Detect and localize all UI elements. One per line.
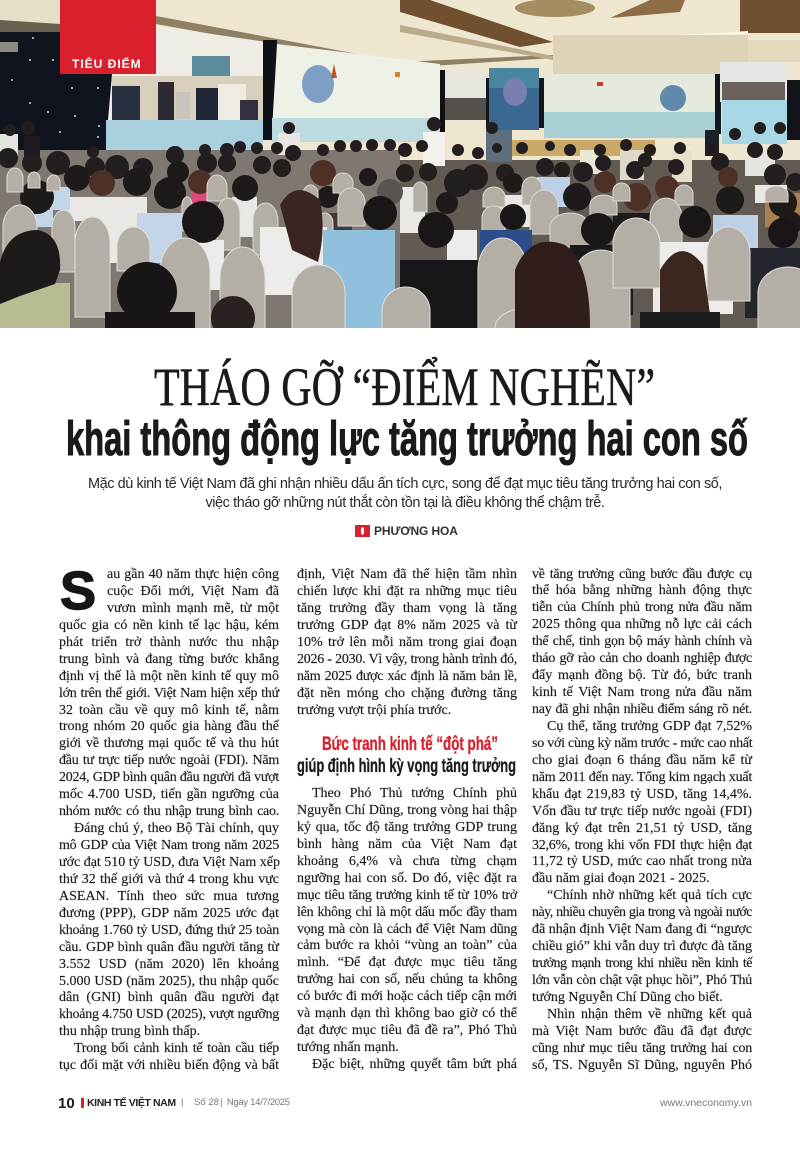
- text column 1: đầu tư trực tiếp nước ngoài (FDI). Năm: [59, 753, 279, 768]
- text column 1: khoảng 4.750 USD (2025), vượt ngưỡng: [59, 1007, 279, 1022]
- forum backdrops and stage: [272, 44, 800, 156]
- text column 1: lớn trên thế giới. Việt Nam hiện xếp thứ: [59, 686, 279, 701]
- section tag: Tiêu điểm: TIÊU ĐIỂM: [72, 57, 142, 71]
- text column 3: Nhìn nhận thêm về những kết quả: [547, 1007, 752, 1022]
- text column 1: thu nhập trung bình thấp.: [59, 1024, 200, 1039]
- section tag: Tiêu điểm: [60, 0, 156, 74]
- text column 3: Cụ thể, tăng trưởng GDP đạt 7,52%: [547, 719, 752, 734]
- text column 2, upper part: 10% trở lên mỗi năm trong giai đoạn: [297, 635, 517, 650]
- text column 3: cũng như mục tiêu tăng trưởng hai con: [532, 1041, 752, 1056]
- front chairs: [3, 205, 800, 348]
- hero photo: conference hall with audience: [0, 0, 800, 328]
- audience: [0, 117, 800, 348]
- text column 2, upper part: trưởng GDP đạt 8% năm 2025 và từ: [297, 618, 517, 633]
- byline with red icon: PHƯƠNG HOA: [374, 524, 458, 538]
- text column 3: này, nhiều chuyên gia trong và ngoài nước: [532, 905, 752, 920]
- text column 2, lower part: Đặc biệt, những quyết tâm bứt phá: [312, 1057, 517, 1072]
- text column 3: đăng ký đạt trên 21,51 tỷ USD, tăng: [532, 821, 752, 836]
- text column 2, upper part: định, Việt Nam đã thể hiện tầm nhìn: [297, 567, 517, 582]
- text column 2, upper part: năm 2025 được xác định là năm bản lề,: [297, 669, 517, 684]
- text column 1: vươn mình mạnh mẽ, từ một: [107, 601, 279, 616]
- deck text: [88, 476, 722, 511]
- text column 2, upper part: đặt nền móng cho chặng đường tăng: [297, 686, 517, 701]
- text column 3: “Chính nhờ những kết quả tích cực: [547, 888, 752, 903]
- text column 3: so với cùng kỳ năm trước - mức cao nhất: [532, 736, 752, 751]
- text column 2, lower part: lên không chỉ là một dấu mốc đầy tham: [297, 905, 517, 920]
- text column 3: cho giai đoạn 6 tháng đầu năm kể từ: [532, 753, 752, 768]
- issue date: | Ngày 14/7/2025: [220, 1097, 290, 1108]
- back rows: [0, 117, 800, 197]
- text column 3: nay đã ghi nhận nhiều điểm sáng rõ nét.: [532, 702, 752, 717]
- dark starry wall: [0, 32, 112, 157]
- text column 2, lower part: trưởng hai con số, nếu chúng ta không: [297, 972, 517, 987]
- text column 3: thể chế, tinh gọn bộ máy hành chính và: [532, 634, 752, 649]
- text column 3: 2025 thông qua những nỗ lực cải cách: [532, 617, 752, 632]
- text column 3: mà Việt Nam bước đầu đã đạt được: [532, 1024, 752, 1039]
- text column 3: đã nhận định Việt Nam đang đi “ngược: [532, 922, 752, 937]
- red marker: [81, 1098, 84, 1108]
- text column 3: khẩu đạt 219,83 tỷ USD, tăng 14,4%.: [532, 787, 752, 802]
- headline: THÁO GỠ “ĐIỂM NGHẼN”: [154, 355, 655, 417]
- text column 1: 3.552 USD (năm 2020) lên khoảng: [59, 957, 279, 972]
- text column 1: 32 toàn cầu về quy mô kinh tế, nằm: [59, 702, 279, 718]
- text column 1: 2024, GDP bình quân đầu người đã vượt: [59, 770, 279, 785]
- text column 2, upper part: trưởng vượt trội phía trước.: [297, 702, 451, 718]
- text column 3: tiễn của Chính phủ trong nửa đầu năm: [532, 600, 752, 615]
- text column 1: giới về thương mại quốc tế và thu hút: [59, 736, 279, 751]
- text column 2, lower part: kỷ qua, tốc độ tăng trưởng GDP trung: [297, 820, 517, 835]
- text column 1: khoảng 1.760 tỷ USD, đứng thứ 25 toàn: [59, 923, 279, 938]
- text column 3: kinh tế Việt Nam trong nửa đầu năm: [532, 685, 752, 700]
- text column 1: định vị thế là một nền kinh tế quy mô: [59, 669, 279, 684]
- text column 1: nhóm nước có thu nhập trung bình cao.: [59, 804, 279, 819]
- text column 2, lower part: Theo Phó Thủ tướng Chính phủ: [312, 786, 517, 801]
- text column 3: đầu năm giai đoạn 2021 - 2025.: [532, 871, 710, 886]
- text column 3: 32,6%, trong khi vốn FDI thực hiện đạt: [532, 838, 752, 852]
- foreground attendees: [0, 230, 720, 340]
- text column 2, lower part: khoảng 6,4% và chưa từng chạm: [297, 854, 517, 869]
- text column 2, lower part: và mạnh dạn thì không bao giờ có thể: [297, 1006, 517, 1021]
- text column 2, lower part: [296, 786, 518, 1072]
- issue number: | Số 28: [181, 1097, 219, 1108]
- text column 1: mô GDP của Việt Nam trong năm 2025: [59, 838, 279, 853]
- text column 3: trưởng mạnh trong khi nhiều nền kinh tế: [532, 956, 752, 971]
- text column 2, lower part: đạt được mục tiêu đã đề ra”, Phó Thủ: [297, 1023, 517, 1038]
- text column 2, lower part: mục tiêu tăng trưởng kinh tế từ 10% trở: [297, 888, 517, 903]
- text column 1: đương (PPP), GDP năm 2025 ước đạt: [59, 906, 279, 921]
- text column 2, upper part: tăng trưởng đầy tham vọng là tăng: [297, 601, 517, 616]
- text column 3: 11,72 tỷ USD, mức cao nhất trong nửa: [532, 854, 752, 869]
- row 2 attendees: [20, 160, 800, 263]
- text column 1: quốc gia có nền kinh tế lạc hậu, kém: [59, 618, 279, 633]
- text column 2, lower part: vọng mà còn là cách để Việt Nam dũng: [297, 922, 517, 936]
- deck text: việc tháo gỡ những nút thắt còn tồn tại là điều không thể chậm trễ.: [205, 495, 605, 511]
- footer: page number and magazine info: [58, 1095, 290, 1112]
- magazine name: KINH TẾ VIỆT NAM: [87, 1097, 176, 1109]
- row 3 attendees: [0, 190, 800, 328]
- hall ceiling and walls: [0, 0, 800, 160]
- text column 2, lower part: ngưỡng hai con số. Do đó, việc đặt ra: [297, 871, 517, 886]
- text column 1: Trong bối cảnh kinh tế toàn cầu tiếp: [74, 1041, 279, 1056]
- text column 2, upper part: chiến lược khi đặt ra những mục tiêu: [297, 584, 517, 599]
- text column 1: mốc 4.700 USD, tiến gần ngưỡng của: [59, 787, 279, 802]
- text column 1: thứ 32 thế giới và thứ 4 trong khu vực: [59, 872, 279, 887]
- text column 3: tháo gỡ rào cản cho doanh nghiệp được: [532, 651, 752, 666]
- text column 1: ASEAN. Tính theo sức mua tương: [59, 889, 279, 904]
- text column 1: phát triển trở thành nước thu nhập: [59, 635, 279, 650]
- drop cap S: S: [60, 561, 96, 621]
- headline: [66, 355, 748, 466]
- text column 1: dân (GNI) bình quân đầu người đạt: [59, 990, 279, 1005]
- text column 1: ước đạt 510 tỷ USD, đưa Việt Nam xếp: [59, 855, 280, 870]
- deck text: Mặc dù kinh tế Việt Nam đã ghi nhận nhiều dấu ấn tích cực, song để đạt mục tiêu tăng trưởng hai con số,: [88, 476, 722, 492]
- text column 3: về tăng trưởng cũng bước đầu được cụ: [532, 566, 752, 582]
- text column 1: cầu. GDP bình quân đầu người tăng từ: [59, 940, 279, 955]
- subheading: [297, 734, 516, 777]
- text column 3: [532, 566, 753, 1073]
- row 2 chairs: [7, 168, 788, 255]
- text column 2, lower part: Nguyễn Chí Dũng, trong vòng hai thập: [297, 803, 517, 818]
- text column 1: trung bình và đang từng bước khẳng: [59, 652, 279, 667]
- text column 3: Vốn đầu tư trực tiếp nước ngoài (FDI): [532, 804, 752, 819]
- text column 2, upper part: [297, 567, 518, 718]
- text column 2, lower part: có bước đi mới hoặc cách tiếp cận mới: [297, 989, 517, 1004]
- text column 3: lớn vẫn còn chật vật phục hồi”, Phó Thủ: [532, 973, 752, 988]
- text column 2, lower part: tướng nhấn mạnh.: [297, 1040, 399, 1055]
- footer website: www.vneconomy.vn: [660, 1097, 752, 1109]
- text column 1: trong nhóm 20 quốc gia hàng đầu thế: [59, 719, 279, 734]
- text column 1: tục đối mặt với nhiều biến động và bất: [59, 1058, 279, 1073]
- text column 3: tướng Nguyễn Chí Dũng cho biết.: [532, 990, 723, 1005]
- text column 3: thể hóa bằng những hành động thực: [532, 583, 752, 598]
- text column 1: Đáng chú ý, theo Bộ Tài chính, quy: [74, 821, 279, 836]
- text column 2, upper part: 2026 - 2030. Vì vậy, trong hành trình đó,: [297, 652, 517, 667]
- text column 3: số, TS. Nguyễn Sĩ Dũng, nguyên Phó: [532, 1058, 752, 1073]
- text column 2, lower part: bình hàng năm của Việt Nam đạt: [297, 837, 517, 852]
- page number: 10: [58, 1095, 75, 1112]
- left video screen: [106, 26, 277, 162]
- text column 1: cuộc Đổi mới, Việt Nam đã: [107, 584, 279, 599]
- icon: author mark: [355, 525, 370, 537]
- text column 1: [59, 567, 280, 1073]
- text column 1: 5.000 USD (năm 2025), thu nhập quốc: [59, 974, 279, 988]
- text column 1: au gần 40 năm thực hiện công: [107, 567, 279, 582]
- text column 3: đẩy mạnh đồng bộ. Từ đó, bức tranh: [532, 668, 752, 683]
- text column 2, lower part: cảm bước ra khỏi “vùng an toàn” của: [297, 938, 517, 953]
- text column 2, lower part: mình. “Để đạt được mục tiêu tăng: [297, 955, 517, 970]
- text column 3: năm 2011 đến nay. Tổng kim ngạch xuất: [532, 770, 752, 785]
- text column 3: chiều gió” khi vẫn duy trì được đà tăng: [532, 939, 752, 954]
